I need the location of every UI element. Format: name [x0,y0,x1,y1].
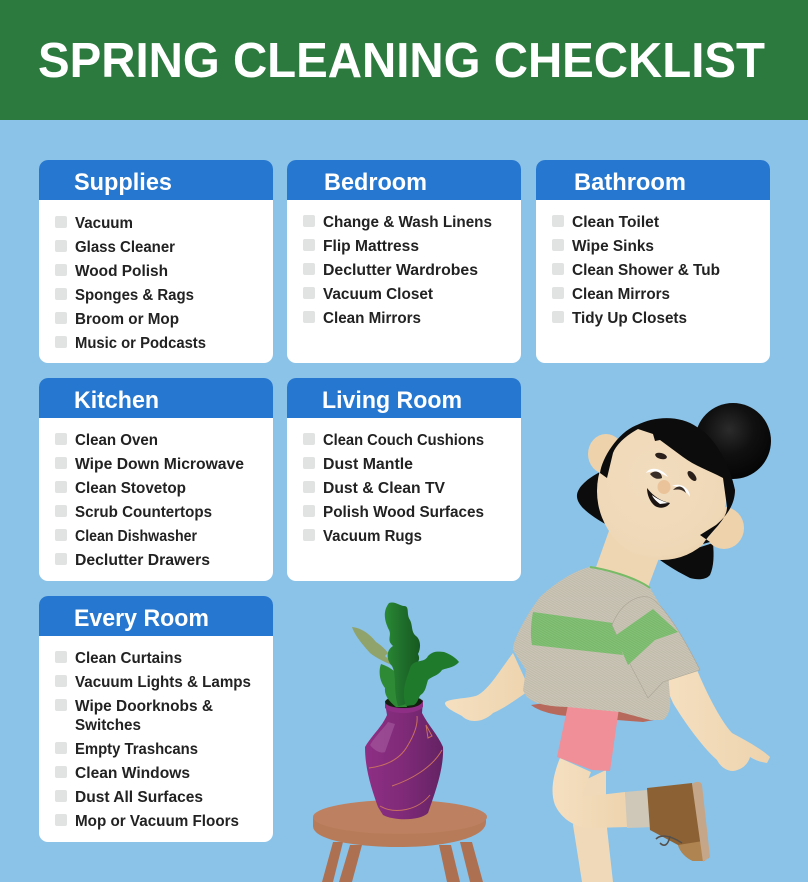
face [646,452,698,508]
sock [625,790,653,828]
boot [647,782,710,862]
item: Mop or Vacuum Floors [75,813,239,830]
illustration: vase lip [385,700,423,713]
item: Flip Mattress [323,238,419,255]
item: Dust & Clean TV [323,480,446,497]
item: Switches [75,717,141,734]
item: Scrub Countertops [75,504,212,521]
item: Clean Curtains [75,650,182,667]
panel: every room [39,596,273,842]
item: Dust All Surfaces [75,789,203,806]
left arm [445,653,530,721]
item: Change & Wash Linens [323,214,492,231]
item: Music or Podcasts [75,335,206,352]
illustration: plant [352,603,459,707]
ears [588,434,744,549]
title: SPRING CLEANING CHECKLIST [38,34,765,88]
item: Wipe Down Microwave [75,456,244,473]
item: Declutter Drawers [75,552,210,569]
heading: supplies: Supplies [74,169,172,196]
item: Clean Windows [75,765,190,782]
item: Clean Oven [75,432,158,449]
item: Vacuum Rugs [323,528,422,545]
illustration: character [445,403,771,882]
item [55,698,213,734]
item: Declutter Wardrobes [323,262,478,279]
panel: kitchen [39,378,273,581]
item: Clean Mirrors [323,310,421,327]
item: Tidy Up Closets [572,310,687,327]
item: Vacuum Closet [323,286,433,303]
sleeve [612,597,700,698]
heading: living room: Living Room [322,387,462,414]
shorts [557,705,619,771]
right arm [663,665,770,771]
hair bun [695,403,771,479]
hair back [577,472,714,579]
item: Glass Cleaner [75,239,175,256]
panel: bedroom [287,160,521,363]
item: Wipe Sinks [572,238,654,255]
item: Clean Shower & Tub [572,262,720,279]
item: Clean Mirrors [572,286,670,303]
heading: kitchen: Kitchen [74,387,159,414]
item: Sponges & Rags [75,287,194,304]
item: Clean Dishwasher [75,528,197,545]
panel: living room [287,378,521,581]
panel: bathroom [536,160,770,363]
item: Broom or Mop [75,311,179,328]
item: Vacuum Lights & Lamps [75,674,251,691]
item: Wood Polish [75,263,168,280]
sweater [513,567,700,720]
item: Dust Mantle [323,456,413,473]
panel: supplies [39,160,273,363]
heading: every room: Every Room [74,605,209,632]
head [597,422,727,560]
item: Polish Wood Surfaces [323,504,484,521]
illustration: stool [313,800,487,882]
raised leg [553,758,628,828]
item: Clean Stovetop [75,480,186,497]
heading: bedroom: Bedroom [324,169,427,196]
title banner [0,0,808,120]
item: Vacuum [75,215,133,232]
item: Empty Trashcans [75,741,198,758]
item: Clean Toilet [572,214,659,231]
item: Clean Couch Cushions [323,432,484,449]
illustration: vase body [365,696,443,819]
sweater inner lining [531,695,668,722]
item: Wipe Doorknobs & [75,698,213,715]
hair front [600,418,735,544]
neck [595,528,662,590]
heading: bathroom: Bathroom [574,169,686,196]
standing leg [573,770,613,882]
